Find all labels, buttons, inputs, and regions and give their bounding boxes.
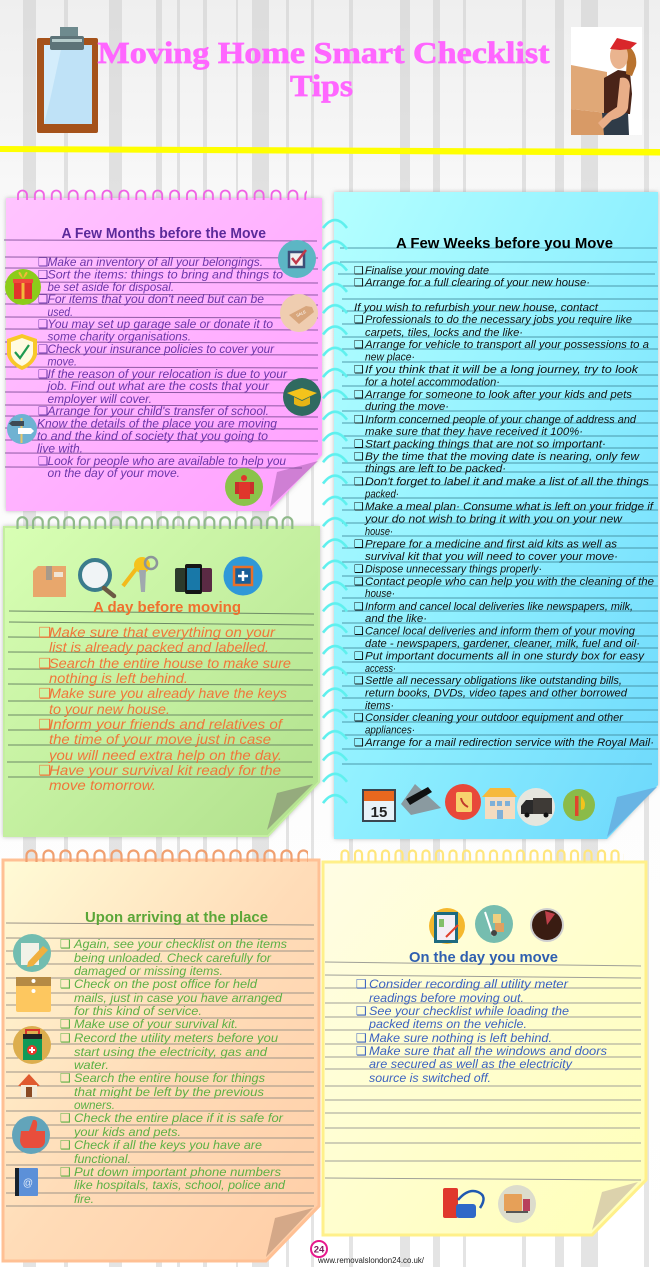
yellow checklist: packed items on the vehicle. <box>368 1017 527 1031</box>
blue checklist: and the like· <box>365 613 427 625</box>
blue page fold <box>607 787 657 837</box>
logo badge: 24 <box>314 1244 325 1256</box>
pink checklist: Arrange for your child's transfer of school. <box>46 406 269 418</box>
blue checklist: ❑ <box>354 413 364 426</box>
green checklist: nothing is left behind. <box>49 670 188 686</box>
pink checklist: Make an inventory of all your belongings. <box>48 257 263 269</box>
blue checklist: If you think that it will be a long journey, try to look <box>365 364 639 376</box>
panel: a day before moving <box>4 516 319 836</box>
blue checklist: ❑ <box>354 475 364 488</box>
orange checklist <box>60 937 287 1206</box>
pink checklist: move. <box>48 356 77 368</box>
blue checklist: ❑ <box>354 674 364 687</box>
orange checklist: ❑ <box>60 1165 71 1179</box>
icon: graduation cap <box>283 378 321 416</box>
blue checklist: ❑ <box>354 338 364 351</box>
pink checklist: live with. <box>37 444 83 456</box>
orange checklist: Record the utility meters before you <box>74 1031 278 1045</box>
panel: a few months before the move <box>4 189 322 511</box>
yellow spiral binding <box>340 849 624 863</box>
icon: clipboard checklist <box>429 908 465 944</box>
yellow checklist: Make sure that all the windows and doors <box>369 1044 607 1058</box>
yellow checklist: readings before moving out. <box>369 991 524 1005</box>
green notepad sheet <box>4 527 319 836</box>
icon: calendar <box>362 789 396 822</box>
pink page fold <box>270 461 318 507</box>
blue checklist: ❑ <box>354 313 364 326</box>
blue checklist: Arrange for someone to look after your kids and pets <box>364 389 633 401</box>
blue checklist: ❑ <box>354 575 364 588</box>
pink checklist: Check your insurance policies to cover your <box>48 344 275 356</box>
icon: address book <box>15 1168 38 1196</box>
orange checklist: damaged or missing items. <box>74 964 223 978</box>
icon: address book: @ <box>23 1178 33 1189</box>
icon: fork and knife <box>563 789 595 821</box>
blue checklist: ❑ <box>354 736 364 749</box>
green checklist: you will need extra help on the day. <box>48 747 282 763</box>
icon: clipboard <box>37 27 98 133</box>
icon: hand truck <box>475 905 513 943</box>
yellow checklist: ❑ <box>356 1004 367 1018</box>
pink checklist: job. Find out what are the costs that your <box>45 381 270 393</box>
blue checklist: during the move· <box>365 401 449 413</box>
orange page fold <box>266 1208 313 1257</box>
green checklist: move tomorrow. <box>49 777 156 793</box>
icon: building <box>482 788 517 819</box>
yellow checklist: Make sure nothing is left behind. <box>369 1031 552 1045</box>
blue checklist: house· <box>365 588 395 600</box>
pink checklist: some charity organisations. <box>48 332 191 344</box>
panel: upon arriving at the place <box>3 849 319 1261</box>
icon: delivery truck <box>517 788 555 826</box>
blue checklist: ❑ <box>354 363 364 376</box>
yellow checklist: ❑ <box>356 1044 367 1058</box>
blue checklist: Cancel local deliveries and inform them of your moving <box>365 626 636 638</box>
pink checklist: on the day of your move. <box>48 468 180 480</box>
pink checklist: ❑ <box>38 342 48 356</box>
blue checklist: ❑ <box>354 276 364 289</box>
pink ruled lines <box>4 240 318 468</box>
heading: On the day you move <box>409 949 558 966</box>
icon: checkbox <box>278 240 316 278</box>
spiral binding on left edge <box>322 215 350 811</box>
blue checklist: make sure that they have received it 100%· <box>365 426 583 438</box>
icon: first aid kit <box>13 1026 51 1064</box>
title: Moving Home Smart Checklist <box>98 35 550 70</box>
pink checklist: ❑ <box>38 317 48 331</box>
blue checklist <box>354 264 654 749</box>
pink checklist: If the reason of your relocation is due to your <box>48 369 288 381</box>
orange checklist: ❑ <box>60 1111 71 1125</box>
heading: A Few Months before the Move <box>62 225 266 242</box>
blue checklist: ❑ <box>354 600 364 613</box>
blue checklist: If you wish to refurbish your new house, contact <box>354 302 599 314</box>
green checklist: ❑ <box>38 686 51 702</box>
yellow checklist: ❑ <box>356 1031 367 1045</box>
icon: envelope <box>16 977 51 1012</box>
pink checklist: Look for people who are available to help you <box>48 456 287 468</box>
heading: A Few Weeks before you Move <box>396 235 613 252</box>
icon: sale tag: SALE <box>295 309 307 318</box>
green checklist: ❑ <box>38 625 51 641</box>
footer: logo and website <box>311 1241 425 1265</box>
yellow page fold <box>592 1182 638 1230</box>
blue checklist: Arrange for a mail redirection service with the Royal Mail· <box>364 737 654 749</box>
orange checklist: ❑ <box>60 1031 71 1045</box>
pink checklist: Know the details of the place you are moving <box>37 418 278 430</box>
blue checklist: Inform concerned people of your change of address and <box>365 414 637 426</box>
icon: signpost <box>7 414 37 444</box>
blue checklist: appliances· <box>365 724 415 736</box>
green checklist: Have your survival kit ready for the <box>49 762 281 778</box>
blue checklist: items· <box>365 700 394 712</box>
blue checklist: date - newspapers, gardener, cleaner, milk, fuel and oil· <box>365 638 640 650</box>
orange spiral binding <box>25 849 308 863</box>
blue checklist: ❑ <box>354 438 364 450</box>
green checklist: ❑ <box>38 656 51 672</box>
yellow checklist: source is switched off. <box>369 1071 491 1085</box>
blue checklist: Settle all necessary obligations like outstanding bills, <box>365 675 622 687</box>
pink notepad sheet <box>6 198 322 511</box>
pink checklist: to and the kind of society that you going to <box>37 431 269 443</box>
pink checklist: Sort the items: things to bring and things to <box>48 270 284 282</box>
blue ruled lines <box>338 248 658 764</box>
blue checklist: ❑ <box>354 650 364 662</box>
pink checklist: ❑ <box>38 454 48 468</box>
yellow checklist: ❑ <box>356 977 367 991</box>
blue checklist: your do not wish to bring it with you on your new <box>364 514 623 526</box>
icon: cardboard box <box>33 566 66 597</box>
blue checklist: packed· <box>364 488 399 500</box>
blue checklist: Don't forget to label it and make a list of all the things <box>365 476 650 488</box>
blue checklist: Inform and cancel local deliveries like newspapers, milk, <box>365 601 633 613</box>
orange checklist: fire. <box>74 1192 94 1206</box>
yellow ruled lines <box>325 962 641 1180</box>
blue checklist: house· <box>365 526 393 538</box>
blue checklist: Professionals to do the necessary jobs you require like <box>365 314 632 326</box>
photo: woman carrying moving box <box>571 27 642 135</box>
blue checklist: access· <box>365 663 396 675</box>
pink checklist: used. <box>48 307 73 319</box>
green checklist: list is already packed and labelled. <box>49 639 269 655</box>
icon: keys <box>123 557 157 592</box>
icon: radar <box>530 908 564 942</box>
orange checklist: Again, see your checklist on the items <box>73 937 287 951</box>
icon: smartphones <box>175 564 212 594</box>
icon: house <box>18 1074 40 1097</box>
blue checklist: ❑ <box>354 538 364 550</box>
website address: www.removalslondon24.co.uk/ <box>317 1256 425 1265</box>
green checklist: Inform your friends and relatives of <box>49 716 284 732</box>
green checklist: Make sure that everything on your <box>49 624 276 640</box>
heading: Upon arriving at the place <box>85 909 268 926</box>
icon: magnifying glass <box>80 560 114 596</box>
green ruled lines <box>7 611 314 777</box>
orange checklist: Check on the post office for held <box>74 977 257 991</box>
orange checklist: ❑ <box>60 937 71 951</box>
blue checklist: Consider cleaning your outdoor equipment and other <box>365 712 624 724</box>
orange checklist: ❑ <box>60 1138 71 1152</box>
blue checklist: return books, DVDs, video tapes and other borrowed <box>365 688 628 700</box>
orange checklist: for this kind of service. <box>74 1004 202 1018</box>
green checklist: ❑ <box>38 763 51 779</box>
yellow checklist: Consider recording all utility meter <box>369 977 569 991</box>
icon: thumbs up <box>12 1116 50 1154</box>
orange checklist: start using the electricity, gas and <box>74 1045 267 1059</box>
blue checklist: Finalise your moving date <box>365 265 489 277</box>
yellow divider <box>0 146 660 156</box>
orange checklist: your kids and pets. <box>73 1125 181 1139</box>
heading: A day before moving <box>93 599 241 616</box>
pink checklist: ❑ <box>38 268 48 282</box>
orange checklist: like hospitals, taxis, school, police and <box>74 1178 285 1192</box>
blue checklist: ❑ <box>354 264 364 277</box>
orange checklist: Check the entire place if it is safe for <box>74 1111 284 1125</box>
icon: first aid in blue circle <box>224 556 262 596</box>
icon: group of people <box>225 468 263 506</box>
orange checklist: functional. <box>74 1152 131 1166</box>
blue checklist: carpets, tiles, locks and the like· <box>365 327 523 339</box>
green spiral binding <box>16 516 296 529</box>
blue checklist: ❑ <box>354 450 364 463</box>
blue checklist: Arrange for a full clearing of your new house· <box>364 277 590 289</box>
pink checklist: ❑ <box>38 292 48 306</box>
orange checklist: Search the entire house for things <box>74 1071 265 1085</box>
blue checklist: Contact people who can help you with the cleaning of the <box>365 576 654 588</box>
green checklist: the time of your move just in case <box>49 731 271 747</box>
icon: notepad and pencil <box>13 934 51 972</box>
orange checklist: being unloaded. Check carefully for <box>74 951 272 965</box>
pink checklist: ❑ <box>38 255 48 269</box>
panel: on the day you move <box>323 849 646 1235</box>
blue checklist: things are left to be packed· <box>365 463 506 475</box>
orange checklist: ❑ <box>60 977 71 991</box>
blue checklist: ❑ <box>354 562 364 576</box>
orange checklist: that might be left by the previous <box>74 1085 264 1099</box>
pink checklist: ❑ <box>38 367 48 381</box>
yellow checklist <box>356 977 607 1085</box>
icon: dustpan and brush <box>401 784 441 815</box>
orange checklist: Make use of your survival kit. <box>74 1017 238 1031</box>
green checklist: Search the entire house to make sure <box>49 655 291 671</box>
icon: shield <box>7 334 37 370</box>
orange notepad sheet <box>3 860 319 1261</box>
blue checklist: Prepare for a medicine and first aid kits as well as <box>365 538 618 550</box>
blue notepad sheet <box>334 192 658 839</box>
pink checklist: ❑ <box>38 404 48 418</box>
title <box>98 35 550 103</box>
green page fold <box>267 784 313 830</box>
green checklist: ❑ <box>38 717 51 733</box>
yellow notepad sheet <box>323 862 646 1235</box>
orange checklist: ❑ <box>60 1071 71 1085</box>
orange checklist: mails, just in case you have arranged <box>74 991 282 1005</box>
orange ruled lines <box>6 923 314 1206</box>
icon: sale tag <box>280 294 318 332</box>
icon: orange truck <box>498 1185 536 1223</box>
pink checklist: You may set up garage sale or donate it to <box>48 319 274 331</box>
orange checklist: Check if all the keys you have are <box>74 1138 262 1152</box>
blue checklist: new place· <box>365 352 415 364</box>
blue checklist: survival kit that you will need to cover your move· <box>365 551 618 563</box>
green checklist: to your new house. <box>49 701 170 717</box>
panel: a few weeks before you move <box>322 192 658 839</box>
blue checklist: Arrange for vehicle to transport all your possessions to a <box>364 339 649 351</box>
blue checklist: ❑ <box>354 388 364 401</box>
blue checklist: Start packing things that are not so important· <box>365 438 606 450</box>
pink checklist <box>37 255 288 480</box>
blue checklist: By the time that the moving date is nearing, only few <box>365 451 640 463</box>
blue checklist: ❑ <box>354 711 364 724</box>
yellow checklist: See your checklist while loading the <box>369 1004 569 1018</box>
title: Tips <box>290 68 353 103</box>
orange checklist: water. <box>74 1058 109 1072</box>
blue checklist: for a hotel accommodation· <box>365 376 500 388</box>
blue checklist: Make a meal plan· Consume what is left on your fridge if <box>365 501 654 513</box>
icon: phone book <box>445 784 481 820</box>
icon: calendar: 15 <box>371 804 387 821</box>
orange checklist: ❑ <box>60 1017 71 1031</box>
green checklist: Make sure you already have the keys <box>49 685 287 701</box>
pink checklist: For items that you don't need but can be <box>48 294 264 306</box>
orange checklist: Put down important phone numbers <box>74 1165 281 1179</box>
blue checklist: ❑ <box>354 624 364 638</box>
blue checklist: ❑ <box>354 500 364 513</box>
pink checklist: employer will cover. <box>48 394 152 406</box>
icon: battery and plug <box>443 1188 484 1218</box>
pink checklist: be set aside for disposal. <box>48 282 174 294</box>
blue checklist: Put important documents all in one sturdy box for easy <box>365 650 646 662</box>
orange checklist: owners. <box>74 1098 115 1112</box>
yellow checklist: are secured as well as the electricity <box>369 1057 573 1071</box>
pink spiral binding <box>16 189 307 200</box>
blue checklist: Dispose unnecessary things properly· <box>365 564 542 576</box>
green checklist <box>38 624 291 793</box>
icon: gift <box>5 269 41 305</box>
